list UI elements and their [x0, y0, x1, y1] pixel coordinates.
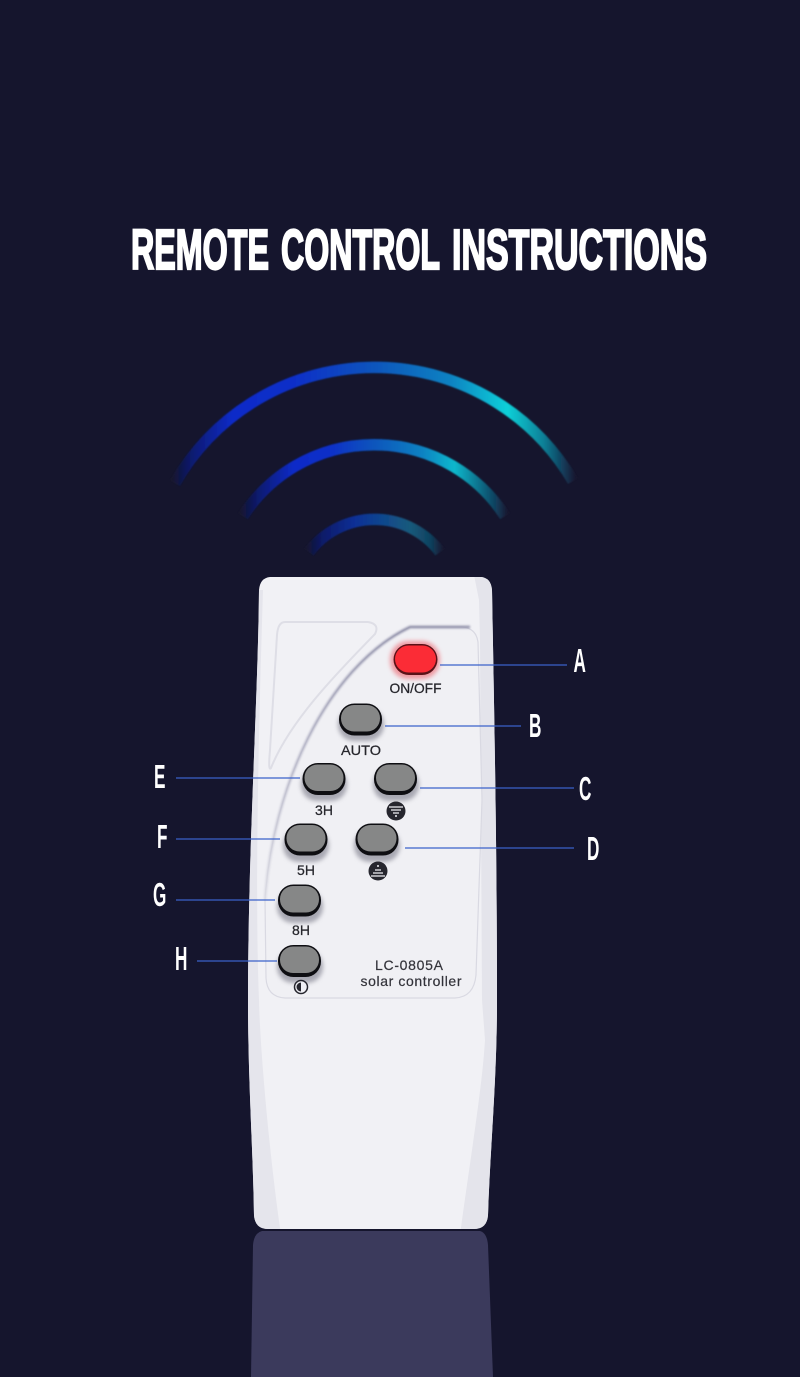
- callout F: F: [157, 818, 167, 856]
- title: [131, 218, 707, 282]
- button F: 5H: 5H: [297, 862, 315, 878]
- callout H: H: [175, 940, 187, 978]
- button G: 8H: 8H: [292, 922, 310, 938]
- callout F: [157, 818, 280, 856]
- title: CONTROL: [281, 218, 440, 282]
- model text: solar controller: [360, 973, 462, 989]
- button B: auto: AUTO: [341, 742, 381, 758]
- model text: [360, 957, 462, 989]
- button A: on/off: [390, 641, 442, 696]
- button A: on/off: ON/OFF: [390, 680, 442, 696]
- button G: 8H: [277, 884, 323, 938]
- callout H: [175, 940, 277, 978]
- title: REMOTE: [131, 218, 269, 282]
- button C: dim down: [373, 763, 419, 820]
- remote control body: [248, 577, 497, 1229]
- button F: 5H: [283, 824, 329, 878]
- callout A: A: [574, 642, 586, 680]
- button E: 3H: 3H: [315, 802, 333, 818]
- model text: LC-0805A: [375, 957, 444, 973]
- signal waves icon: [175, 367, 573, 552]
- callout E: E: [154, 758, 165, 796]
- upper left recess outline: [269, 622, 376, 769]
- callout G: G: [153, 876, 166, 914]
- callout D: D: [587, 830, 599, 868]
- button B: auto: [338, 704, 384, 758]
- callout B: B: [529, 707, 541, 745]
- remote reflection: [251, 1231, 493, 1377]
- button panel recess: [265, 627, 482, 998]
- callout C: C: [579, 770, 591, 808]
- button E: 3H: [301, 763, 347, 818]
- callout G: [153, 876, 275, 914]
- button D: dim up: [354, 824, 400, 880]
- button H: mode: [277, 945, 323, 994]
